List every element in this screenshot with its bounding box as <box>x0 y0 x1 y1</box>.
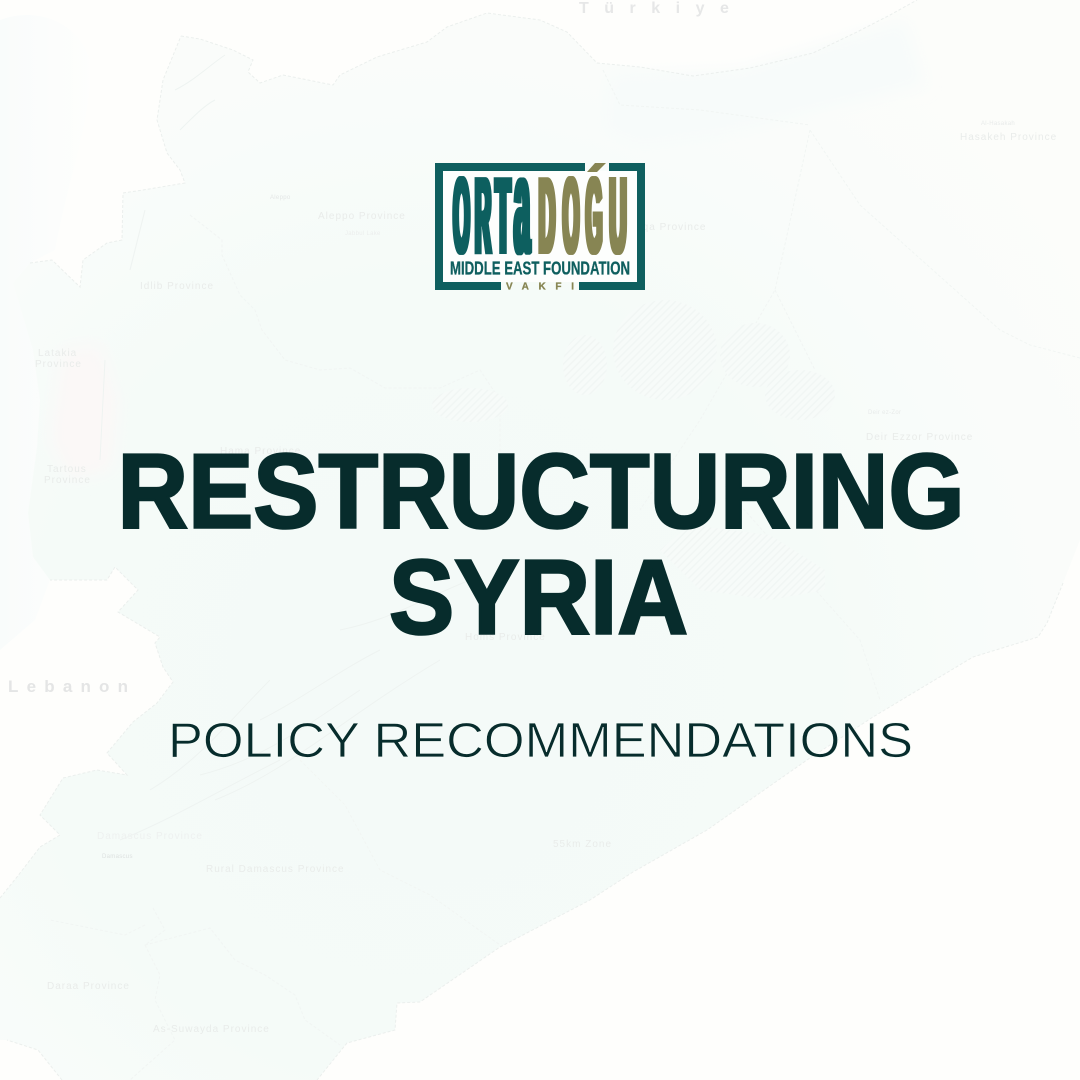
logo: Ortadoğu Middle East Foundation <box>435 163 645 290</box>
province labels: Aleppo <box>270 195 291 201</box>
province labels: Aleppo Province <box>318 211 406 222</box>
province labels: Deir Ezzor Province <box>866 432 973 443</box>
logo word: ORTA: O <box>453 158 470 276</box>
province labels: Province <box>35 359 82 370</box>
logo word: DOĞU: D <box>539 158 555 276</box>
logo word: DOĞU: U <box>609 157 627 275</box>
logo frame <box>439 167 641 286</box>
province labels: Damascus Province <box>97 831 203 842</box>
province labels: Province <box>44 475 91 486</box>
title: SYRIA <box>389 538 688 656</box>
province labels: As-Suwayda Province <box>153 1024 270 1035</box>
province labels: Hasakeh Province <box>960 132 1057 143</box>
province labels: Damascus <box>102 854 133 860</box>
map: hatched zones <box>432 300 835 600</box>
province labels: Jabbul Lake <box>345 231 381 237</box>
logo word: DOĞU: Ğ <box>586 158 602 276</box>
province labels: Rural Damascus Province <box>206 864 345 875</box>
logo word: DOĞU: O <box>563 158 579 276</box>
label: Türkiye: Türkiye <box>579 0 744 17</box>
coastal mountain tint <box>50 345 118 480</box>
province labels: 55km Zone <box>553 839 612 850</box>
province labels: Ar-Raqqa Province <box>605 222 706 233</box>
logo word: DOĞU <box>538 176 628 255</box>
province labels: Daraa Province <box>47 981 130 992</box>
province labels: Homs Province <box>465 632 546 643</box>
logo word: ORTA: T <box>495 157 511 275</box>
north-east tinted zone <box>605 20 925 145</box>
label: Lebanon: Lebanon <box>8 677 136 696</box>
title: RESTRUCTURING <box>118 432 964 550</box>
subtitle: POLICY RECOMMENDATIONS <box>168 714 913 768</box>
province labels: Hama Province <box>220 446 301 457</box>
province labels: Deir ez-Zor <box>868 410 901 416</box>
province labels: Latakia <box>38 348 77 359</box>
province labels: Tartous <box>47 464 87 475</box>
logo word: ORTA: a <box>514 130 530 281</box>
province labels: Idlib Province <box>140 281 214 292</box>
title <box>118 432 964 656</box>
logo word: ORTA: R <box>475 158 491 276</box>
province labels: Al-Hasakah <box>981 121 1015 127</box>
map: terrain ridges <box>100 55 470 840</box>
logo text: Vakfi: VAKFI <box>506 282 574 292</box>
map background: sea tint <box>0 15 91 650</box>
logo word: ORTA <box>453 130 530 281</box>
logo text: Middle East Foundation: MIDDLE EAST FOUNDATION <box>450 258 630 278</box>
